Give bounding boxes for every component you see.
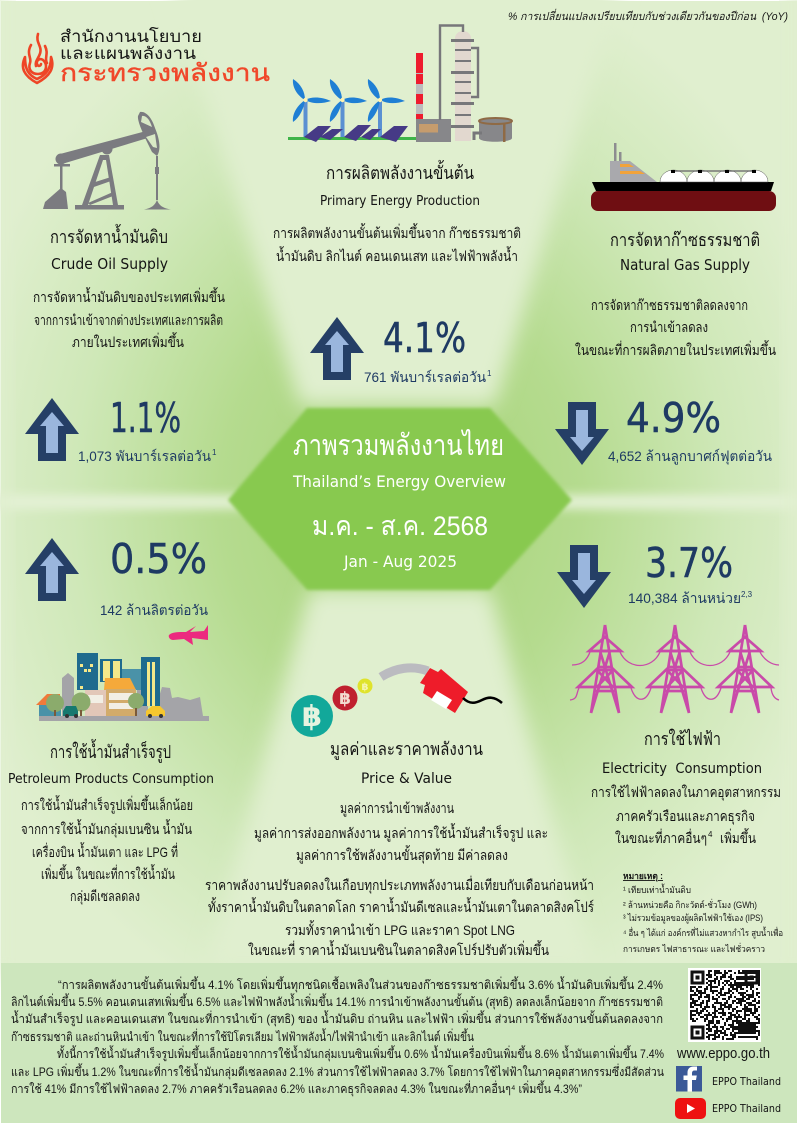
icon: ship	[591, 143, 776, 211]
description: electricity: 4	[708, 830, 713, 839]
subtitle: crude oil: Crude Oil Supply	[51, 255, 168, 273]
arrow down	[557, 545, 611, 608]
description: primary energy: น้ำมันดิบ ลิกไนต์ คอนเดนเสท และไฟฟ้าพลังน้ำ	[276, 246, 518, 264]
icon: facebook	[676, 1066, 702, 1092]
logo	[23, 27, 270, 87]
description: petroleum: เครื่องบิน น้ำมันเตา และ LPG ที่	[32, 842, 178, 860]
icon: city skyline	[36, 653, 209, 721]
stat: petroleum	[25, 535, 208, 618]
description: crude oil: ภายในประเทศเพิ่มขึ้น	[72, 332, 184, 350]
summary text: การใช้ 41% มีการใช้ไฟฟ้าลดลง 2.7% ภาคครัวเรือนลดลง 6.2% และภาคธุรกิจลดลง 4.3% ในขณะที่ภาคอื่นๆ⁴ เพิ่มขึ้น 4.3%”	[11, 1080, 582, 1097]
center hexagon	[228, 408, 572, 590]
ministry name: กระทรวงพลังงาน	[60, 60, 270, 87]
icon: power pylons	[570, 625, 779, 713]
value: 4.1%	[383, 314, 466, 362]
description: petroleum: กลุ่มดีเซลลดลง	[70, 888, 140, 905]
description: crude oil: การจัดหาน้ำมันดิบของประเทศเพิ่มขึ้น	[33, 287, 225, 305]
description: petroleum: เพิ่มขึ้น ในขณะที่การใช้น้ำมัน	[41, 864, 175, 882]
stat: primary energy	[310, 314, 492, 385]
description: petroleum: จากการใช้น้ำมันกลุ่มเบนซิน น้ำมัน	[21, 819, 192, 838]
heading: English overview: Thailand’s Energy Overview	[292, 472, 506, 491]
subtitle: price and value: Price & Value	[361, 771, 452, 787]
unit: 4,652 ล้านลูกบาศก์ฟุตต่อวัน	[608, 448, 772, 465]
icon: flame	[23, 34, 52, 83]
subtitle: petroleum: Petroleum Products Consumption	[8, 772, 214, 787]
icon: coins and fuel nozzle: ฿	[362, 682, 369, 693]
description: natural gas	[575, 297, 776, 358]
summary text: น้ำมันสำเร็จรูป และคอนเดนเสท ในขณะที่การนำเข้า (สุทธิ) ของ น้ำมันดิบ ถ่านหิน และไฟฟ้า เพิ่มขึ้น ส่วนการใช้พลังงานขั้นต้นลดลงจาก	[11, 1010, 663, 1027]
storage tank	[479, 121, 512, 142]
description: price and value: ในขณะที่ ราคาน้ำมันเบนซินในตลาดสิงคโปร์ปรับตัวเพิ่มขึ้น	[248, 940, 549, 958]
description: price and value: มูลค่าการใช้พลังงานขั้นสุดท้าย มีค่าลดลง	[296, 845, 508, 864]
description: electricity: ในขณะที่ภาคอื่นๆ	[615, 829, 707, 846]
footnotes	[623, 871, 783, 954]
arrow down	[555, 402, 609, 465]
description: price and value: มูลค่าการส่งออกพลังงาน มูลค่าการใช้น้ำมันสำเร็จรูป และ	[254, 823, 548, 842]
QR code	[688, 968, 761, 1042]
unit: 140,384 ล้านหน่วย	[628, 590, 741, 606]
value: 1.1%	[110, 394, 181, 442]
footnotes: ² ล้านหน่วยคือ กิกะวัตต์-ชั่วโมง (GWh)	[623, 898, 757, 910]
facebook label: EPPO Thailand	[712, 1076, 781, 1088]
title: petroleum: การใช้น้ำมันสำเร็จรูป	[50, 739, 171, 763]
summary text	[11, 976, 664, 1097]
arrow up	[25, 538, 79, 601]
subtitle: natural gas: Natural Gas Supply	[620, 256, 750, 274]
org name line 2: และแผนพลังงาน	[60, 45, 196, 63]
grass	[288, 137, 423, 140]
description: electricity: เพิ่มขึ้น	[720, 828, 756, 846]
description: crude oil	[33, 287, 225, 350]
description: petroleum: การใช้น้ำมันสำเร็จรูปเพิ่มขึ้นเล็กน้อย	[21, 795, 193, 814]
summary text: ทั้งนี้การใช้น้ำมันสำเร็จรูปเพิ่มขึ้นเล็กน้อยจากการใช้น้ำมันกลุ่มเบนซินเพิ่มขึ้น 0.6% น้ำมันเครื่องบินเพิ่มขึ้น 8.6% น้ำมันเตาเพิ่มขึ้น 7.4%	[57, 1045, 664, 1062]
footnotes: ¹ เทียบเท่าน้ำมันดิบ	[623, 883, 691, 895]
footnotes: หมายเหตุ :	[623, 871, 663, 882]
description: price and value	[205, 800, 594, 958]
arrow up	[310, 317, 364, 380]
icon: energy production plant	[288, 26, 512, 142]
description: natural gas: การจัดหาก๊าซธรรมชาติลดลงจาก	[591, 297, 748, 313]
icon: airplane	[169, 625, 208, 645]
icon: oil pump jack	[43, 112, 171, 210]
wind turbines	[293, 79, 405, 137]
unit: 142 ล้านลิตรต่อวัน	[100, 602, 208, 618]
description: primary energy: การผลิตพลังงานขั้นต้นเพิ่มขึ้นจาก ก๊าซธรรมชาติ	[273, 223, 521, 241]
subtitle: electricity: Electricity Consumption	[602, 761, 762, 777]
description: primary energy	[273, 223, 521, 264]
youtube label: EPPO Thailand	[712, 1103, 781, 1115]
stat: natural gas	[555, 394, 772, 465]
unit: 761 พันบาร์เรลต่อวัน	[364, 369, 486, 385]
org name line 1: สำนักงานนโยบาย	[60, 27, 202, 46]
description: electricity: ภาคครัวเรือนและภาคธุรกิจ	[616, 808, 755, 825]
stat: crude oil	[25, 394, 217, 464]
footnotes: การเกษตร ไฟสาธารณะ และไฟชั่วคราว	[623, 942, 765, 954]
icon: coins and fuel nozzle: ฿	[302, 701, 322, 733]
value: 4.9%	[626, 394, 721, 442]
website: www.eppo.go.th	[676, 1046, 770, 1062]
chimney	[416, 53, 423, 120]
footnotes: ³ ไม่รวมข้อมูลของผู้ผลิตไฟฟ้าใช้เอง (IPS)	[623, 913, 763, 924]
description: price and value: มูลค่าการนำเข้าพลังงาน	[340, 800, 454, 817]
icon: coins and fuel nozzle: ฿	[339, 689, 351, 708]
superscript: 2,3	[741, 590, 753, 599]
title: crude oil: การจัดหาน้ำมันดิบ	[50, 224, 168, 247]
icon: coins and fuel nozzle	[291, 668, 502, 737]
unit: 1,073 พันบาร์เรลต่อวัน	[78, 448, 211, 464]
description: crude oil: จากการนำเข้าจากต่างประเทศและการผลิต	[34, 312, 223, 328]
value: 0.5%	[110, 535, 207, 583]
summary text: “การผลิตพลังงานขั้นต้นเพิ่มขึ้น 4.1% โดยเพิ่มขึ้นทุกชนิดเชื้อเพลิงในส่วนของก๊าซธรรมชาติเพิ่มขึ้น 3.6% น้ำมันดิบเพิ่มขึ้น 2.4%	[58, 976, 663, 993]
description: petroleum	[21, 795, 193, 905]
description: electricity	[591, 784, 781, 846]
heading: Thai overview: ภาพรวมพลังงานไทย	[293, 428, 504, 462]
superscript: 1	[487, 369, 492, 378]
icon: youtube	[675, 1098, 706, 1119]
description: price and value: รวมทั้งราคานำเข้า LPG และราคา Spot LNG	[285, 920, 515, 938]
title: primary energy: การผลิตพลังงานขั้นต้น	[326, 160, 474, 183]
value: 3.7%	[645, 539, 733, 587]
description: price and value: ทั้งราคาน้ำมันดิบในตลาดโลก ราคาน้ำมันดีเซลและน้ำมันเตาในตลาดสิงคโปร์	[208, 897, 594, 915]
title: price and value: มูลค่าและราคาพลังงาน	[330, 739, 483, 760]
description: natural gas: การนำเข้าลดลง	[630, 319, 708, 335]
solar panels	[304, 125, 408, 142]
period: Thai: ม.ค. - ส.ค. 2568	[312, 511, 488, 541]
period: English: Jan - Aug 2025	[343, 552, 457, 571]
summary text: และ LPG เพิ่มขึ้น 1.2% ในขณะที่การใช้น้ำมันกลุ่มดีเซลลดลง 2.1% ส่วนการใช้ไฟฟ้าลดลง 3.7% โดยการใช้ไฟฟ้าในภาคอุตสาหกรรมซึ่งมีสัดส่วน	[11, 1063, 664, 1080]
title: natural gas: การจัดหาก๊าซธรรมชาติ	[610, 230, 760, 250]
summary text: ลิกไนต์เพิ่มขึ้น 5.5% คอนเดนเสทเพิ่มขึ้น 6.5% และไฟฟ้าพลังน้ำเพิ่มขึ้น 14.1% การนำเข้าพลังงานขั้นต้น (สุทธิ) ลดลงเล็กน้อยจาก ก๊าซธรรมชาติ	[11, 993, 663, 1010]
superscript: 1	[212, 448, 217, 457]
stat: electricity	[557, 539, 753, 608]
subtitle: primary energy: Primary Energy Production	[320, 193, 480, 209]
title: electricity: การใช้ไฟฟ้า	[644, 728, 721, 749]
panel: summary footer	[1, 963, 797, 1123]
description: price and value: ราคาพลังงานปรับลดลงในเกือบทุกประเภทพลังงานเมื่อเทียบกับเดือนก่อนหน้า	[205, 876, 594, 894]
arrow up	[25, 398, 79, 461]
summary text: ก๊าซธรรมชาติ และถ่านหินนำเข้า ในขณะที่การใช้ปิโตรเลียม ไฟฟ้าพลังน้ำ/ไฟฟ้านำเข้า และลิกไนต์ เพิ่มขึ้น	[11, 1028, 474, 1044]
distillation column	[455, 31, 471, 141]
note: YoY: % การเปลี่ยนแปลงเปรียบเทียบกับช่วงเดียวกันของปีก่อน (YoY)	[508, 8, 788, 23]
